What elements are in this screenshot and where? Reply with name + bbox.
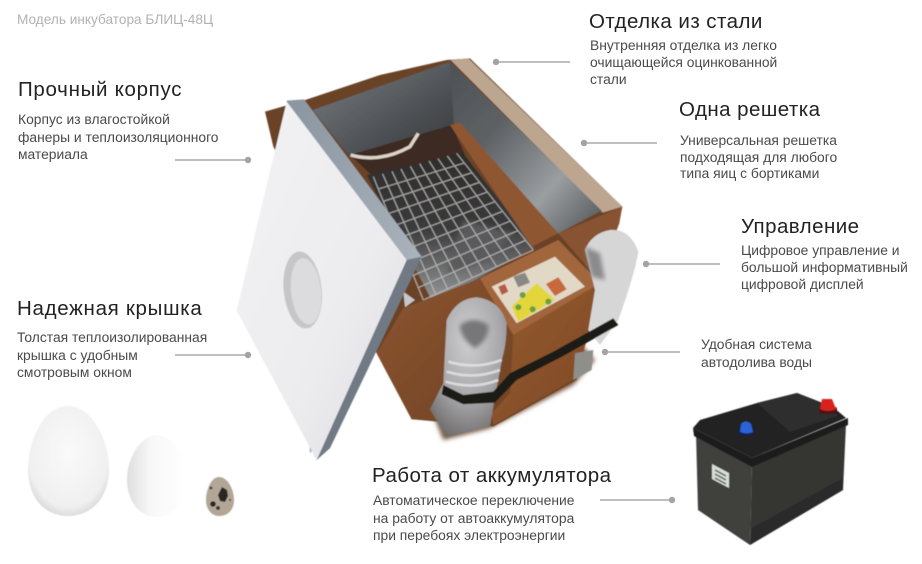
rim: plywood top right edge bbox=[451, 58, 622, 213]
feature: single grid bbox=[581, 98, 837, 181]
text: water system description: Удобная система bbox=[701, 336, 812, 352]
feature: steel finish bbox=[493, 10, 777, 87]
text: water system description: автодолива воды bbox=[701, 354, 812, 370]
bottle: left bbox=[430, 297, 507, 437]
body: back wooden rim bbox=[265, 58, 622, 427]
icon: chicken egg bbox=[127, 435, 187, 517]
heading: single grid: Одна решетка bbox=[679, 98, 821, 121]
text: control description: Цифровое управление и bbox=[741, 242, 900, 258]
control panel bbox=[492, 257, 585, 323]
text: battery operation description: Автоматическое переключение bbox=[373, 492, 575, 508]
bottle ribs bbox=[446, 360, 502, 385]
heading: steel finish: Отделка из стали bbox=[589, 10, 763, 33]
leader line: reliable lid bbox=[175, 352, 251, 358]
text: sturdy body description: Корпус из влагостойкой bbox=[18, 111, 170, 127]
lid: side frame bbox=[287, 99, 422, 453]
feature: reliable lid bbox=[17, 297, 251, 380]
battery bbox=[693, 393, 848, 545]
leader line: single grid bbox=[581, 140, 657, 146]
incubator photo bbox=[237, 58, 638, 461]
feature: water system bbox=[602, 336, 812, 370]
text: single grid description: Универсальная решетка bbox=[680, 132, 837, 148]
wood: front right face bbox=[492, 283, 600, 425]
mesh grid bbox=[373, 153, 533, 300]
heading: sturdy body: Прочный корпус bbox=[18, 78, 182, 101]
leader line: water system bbox=[602, 349, 680, 355]
heading: control: Управление bbox=[741, 215, 859, 238]
battery top rim bbox=[693, 418, 848, 467]
wooden partition bbox=[450, 123, 558, 247]
text: sturdy body description: фанеры и теплоизоляционного bbox=[18, 129, 219, 145]
water hose bbox=[351, 133, 418, 158]
subtitle: incubator model: Модель инкубатора БЛИЦ-48Ц bbox=[17, 12, 213, 27]
battery right face bbox=[750, 424, 846, 545]
strap bbox=[442, 318, 618, 404]
lid: white panel bbox=[237, 102, 407, 460]
feature: battery operation bbox=[372, 464, 675, 543]
icon: goose egg bbox=[28, 406, 109, 516]
text: reliable lid description: смотровым окном bbox=[17, 364, 132, 380]
text: steel finish description: очищающейся оцинкованной bbox=[590, 54, 777, 70]
battery left face bbox=[696, 433, 752, 545]
interior: floor bbox=[367, 153, 535, 303]
heading: reliable lid: Надежная крышка bbox=[17, 297, 202, 320]
leader line: battery operation bbox=[600, 497, 675, 503]
terminal: negative blue bbox=[738, 422, 754, 436]
icon: quail egg bbox=[206, 477, 234, 516]
terminal: positive red bbox=[819, 399, 837, 414]
leader line: steel finish bbox=[493, 59, 570, 65]
interior: back metal wall bbox=[313, 62, 454, 157]
shadow under box bbox=[430, 347, 595, 440]
feature: sturdy body bbox=[18, 78, 251, 163]
text: steel finish description: стали bbox=[590, 71, 627, 87]
pipe: bottle base bbox=[573, 350, 593, 380]
white corner near lid bbox=[403, 292, 415, 307]
wood: front left face bbox=[377, 278, 515, 423]
battery lid bbox=[693, 393, 846, 458]
wood: right upper side bbox=[558, 207, 622, 280]
control compartment bbox=[480, 240, 600, 335]
text: steel finish description: Внутренняя отделка из легко bbox=[590, 37, 777, 53]
battery label bbox=[712, 464, 729, 488]
lid: viewing window bbox=[280, 250, 326, 330]
text: sturdy body description: материала bbox=[18, 146, 88, 162]
text: single grid description: типа яиц с бортиками bbox=[680, 165, 819, 181]
bottle: right bbox=[585, 230, 638, 345]
interior: right metal wall bbox=[450, 62, 602, 233]
text: single grid description: подходящая для любого bbox=[680, 149, 837, 165]
leader line: control bbox=[643, 261, 720, 267]
text: reliable lid description: крышка с удобным bbox=[17, 347, 138, 363]
interior: wood back under hose bbox=[350, 125, 465, 177]
text: control description: большой информативный bbox=[741, 259, 908, 275]
text: control description: цифровой дисплей bbox=[741, 276, 864, 292]
text: battery operation description: на работу от автоаккумулятора bbox=[373, 510, 575, 526]
text: reliable lid description: Толстая теплоизолированная bbox=[17, 329, 207, 345]
feature: control bbox=[643, 215, 908, 292]
leader line: sturdy body bbox=[175, 157, 251, 163]
heading: battery operation: Работа от аккумулятора bbox=[372, 464, 612, 487]
text: battery operation description: при перебоях электроэнергии bbox=[373, 527, 565, 543]
eggs bbox=[28, 406, 234, 517]
